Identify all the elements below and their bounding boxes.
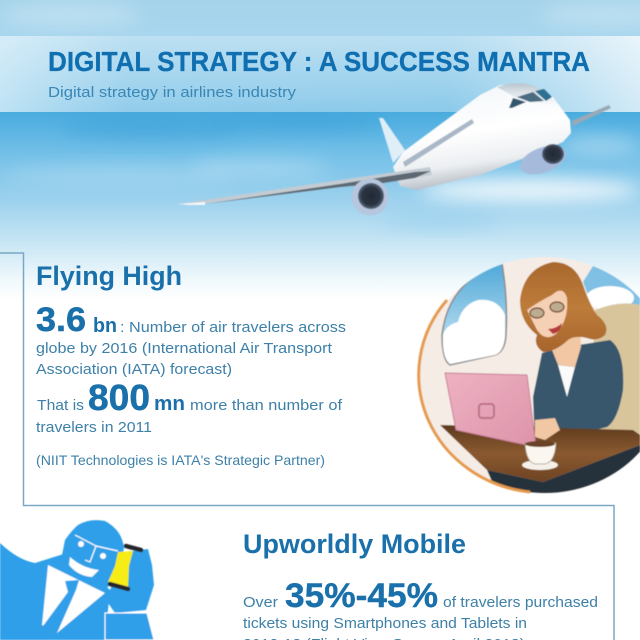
text: of travelers purchased: of travelers purchased <box>443 594 598 611</box>
panel: Flying High text <box>36 261 346 468</box>
icon: jacket <box>532 340 624 430</box>
panel: Upworldly Mobile text <box>243 529 598 640</box>
icon: shirt <box>42 565 105 633</box>
icon: fuselage <box>393 84 571 190</box>
heading: Upworldly Mobile: Upworldly Mobile <box>243 529 466 559</box>
icon: hand <box>535 418 560 440</box>
stat unit: bn: bn <box>93 315 117 337</box>
icon: mouth <box>548 323 562 334</box>
text: air travelers line 1: : Number of air travelers across <box>120 319 346 336</box>
text: air travelers line 2: globe by 2016 (International Air Transport <box>36 340 333 357</box>
illustration: man with phone <box>0 520 154 640</box>
subtitle: Digital strategy in airlines industry <box>48 84 297 101</box>
icon: right engine <box>516 140 570 180</box>
icon: right window <box>583 266 640 310</box>
heading: Flying High: Flying High <box>36 261 182 291</box>
icon: seat <box>590 303 640 440</box>
icon: tie <box>43 580 79 633</box>
icon: head <box>62 520 124 590</box>
icon: table <box>440 425 640 482</box>
icon: cabin window strip <box>403 119 474 167</box>
icon: brow and nose line <box>75 535 118 562</box>
panel frame line <box>0 253 614 640</box>
icon: body <box>0 543 110 640</box>
icon: tail fin <box>379 118 405 163</box>
icon: left window <box>442 263 506 365</box>
icon: blouse <box>558 365 575 397</box>
icon: neck <box>552 336 582 368</box>
icon: smile <box>69 557 99 577</box>
icon: hair <box>520 262 606 352</box>
icon: face <box>527 291 567 337</box>
icon: glasses <box>530 302 564 318</box>
text: air travelers line 3: Association (IATA) forecast) <box>36 361 232 378</box>
icon: left engine <box>352 178 388 216</box>
text: that is: That is <box>37 397 84 414</box>
sky background <box>0 0 640 300</box>
stat unit: mn: mn <box>154 393 185 415</box>
icon: phone <box>108 551 133 587</box>
icon: cockpit roof shading <box>497 83 562 108</box>
icon: eyes <box>78 541 106 559</box>
cabin wall <box>420 256 612 492</box>
text: tickets line: tickets using Smartphones and Tablets in <box>243 615 527 632</box>
text: NIIT note: (NIIT Technologies is IATA's Strategic Partner) <box>36 452 325 468</box>
illustration: airplane <box>178 83 611 216</box>
icon: phone ends <box>110 546 141 589</box>
icon: left wing <box>178 167 432 205</box>
orange ring arc <box>419 300 530 492</box>
icon: laptop <box>445 373 536 447</box>
icon: coffee cup <box>522 441 558 470</box>
text: over: Over <box>243 594 278 611</box>
icon: sleeve <box>105 613 154 640</box>
illustration: woman with laptop <box>419 255 640 500</box>
stat: 800: 800 <box>88 377 150 418</box>
stat: 35%-45%: 35%-45% <box>285 577 438 615</box>
icon: hand <box>106 549 154 613</box>
icon: right wing <box>572 105 611 126</box>
icon: cockpit windows <box>509 89 552 108</box>
text: travelers in 2011: travelers in 2011 <box>36 419 152 436</box>
stat: 3.6 bn: 3.6 <box>36 301 86 339</box>
title: DIGITAL STRATEGY : A SUCCESS MANTRA <box>48 46 590 77</box>
text: more than: more than number of <box>190 397 343 414</box>
title band <box>0 36 640 112</box>
